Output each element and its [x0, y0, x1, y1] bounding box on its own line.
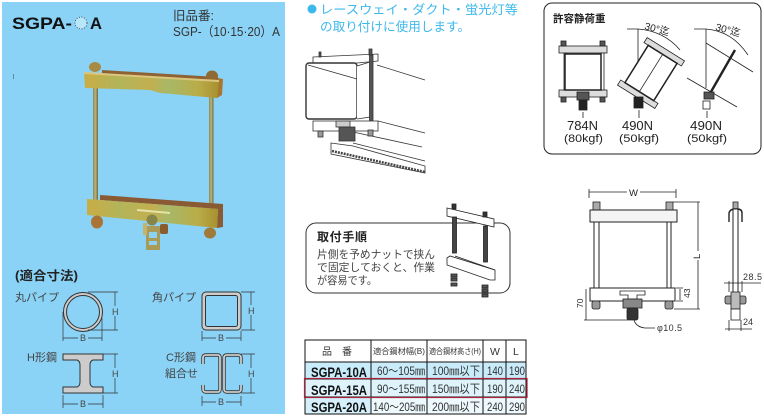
diagram: combined C-channel: C形鋼	[166, 350, 196, 364]
table row: SGPA-20A: 240	[487, 400, 503, 414]
table header: L	[513, 346, 519, 358]
dimension drawing: side view	[724, 202, 762, 331]
diagram: round pipe	[15, 291, 120, 343]
load diagram: side tilted 30 degrees: 490N	[690, 119, 722, 133]
load diagram: upright	[559, 41, 607, 145]
load diagram: tilted 30 degrees: 30°迄	[643, 19, 671, 38]
panel: allowable static load: 許容静荷重	[553, 12, 606, 25]
table row: SGPA-10A: 140	[487, 364, 503, 378]
load diagram: side tilted 30 degrees: (50kgf)	[687, 133, 727, 145]
diagram: square pipe: 角パイプ	[152, 291, 196, 304]
diagram: combined C-channel: 組合せ	[165, 367, 198, 380]
old part number	[173, 9, 280, 39]
diagram: H-beam	[27, 350, 120, 409]
diagram: square pipe	[152, 291, 256, 343]
diagram: H-beam: H	[112, 369, 118, 379]
title: SGPA-	[12, 14, 72, 33]
callout: installation procedure: が容易です。	[317, 273, 377, 287]
diagram: combined C-channel: H	[248, 369, 254, 379]
dimension drawing: front view: 43	[682, 288, 692, 298]
dimension drawing: front view: φ10.5	[657, 323, 682, 333]
callout: installation procedure: 取付手順	[317, 229, 367, 244]
table row: SGPA-10A: 190	[509, 364, 525, 378]
diagram: combined C-channel	[165, 350, 256, 407]
table row: SGPA-20A: 140～205㎜	[373, 400, 425, 414]
callout: installation procedure: 片側を予めナットで挟ん	[317, 247, 435, 261]
load diagram: tilted 30 degrees: 490N	[622, 119, 653, 133]
title	[12, 14, 102, 33]
heading: applicable sizes: (適合寸法)	[15, 268, 78, 283]
table row: SGPA-20A: 290	[509, 400, 525, 414]
dimension drawing: front view: 70	[575, 298, 585, 308]
illustration: installation steps	[447, 204, 495, 297]
table row: SGPA-15A: 240	[509, 382, 525, 396]
dimension drawing: side view: 28.5	[743, 272, 762, 282]
panel: allowable static load	[544, 3, 761, 154]
diagram: square pipe: B	[218, 333, 224, 343]
diagram: H-beam: H形鋼	[27, 350, 57, 364]
table row: SGPA-15A: 90～155㎜	[377, 382, 425, 396]
dimension drawing: front view: W	[629, 188, 638, 199]
diagram: round pipe: 丸パイプ	[15, 291, 59, 304]
load diagram: tilted 30 degrees	[618, 19, 684, 145]
load diagram: tilted 30 degrees: (50kgf)	[619, 133, 659, 145]
table header: W	[490, 346, 500, 358]
table row: SGPA-15A: 150㎜以下	[432, 382, 480, 396]
dimension drawing: front view: L	[692, 254, 703, 259]
callout: installation procedure: で固定しておくと、作業	[317, 261, 435, 274]
table row: SGPA-15A: 190	[487, 382, 503, 396]
product photo: bracket	[84, 62, 223, 250]
dimension drawing: side view: 24	[743, 317, 753, 327]
table header: 適合鋼材高さ(H)	[429, 346, 481, 356]
dimension drawing: front view	[575, 188, 703, 333]
table row: SGPA-10A: SGPA-10A	[311, 364, 367, 380]
table row: SGPA-20A: SGPA-20A	[311, 399, 367, 415]
diagram: square pipe: H	[248, 306, 254, 316]
table row: SGPA-10A: 60～105㎜	[377, 364, 425, 378]
load diagram: upright: (80kgf)	[564, 133, 603, 145]
usage note	[308, 2, 518, 34]
diagram: round pipe: B	[80, 333, 86, 343]
old part number: 旧品番:	[173, 9, 214, 23]
diagram: combined C-channel: B	[218, 397, 224, 407]
load diagram: side tilted 30 degrees	[687, 20, 753, 145]
table header	[322, 346, 519, 358]
table header: 適合鋼材幅(B)	[373, 346, 425, 356]
old part number: SGP-（10·15·20）A	[173, 24, 280, 39]
usage note: の取り付けに使用します。	[320, 19, 470, 34]
table row: SGPA-10A: 100㎜以下	[432, 364, 480, 378]
load diagram: upright: 784N	[567, 119, 598, 133]
load diagram: side tilted 30 degrees: 30°迄	[714, 20, 742, 39]
table row: SGPA-20A: 200㎜以下	[432, 400, 480, 414]
illustration: duct mounting	[306, 49, 425, 173]
title: A	[90, 14, 102, 33]
table row: SGPA-15A: SGPA-15A	[311, 382, 367, 398]
table row: SGPA-20A	[311, 399, 525, 415]
diagram: H-beam: B	[80, 399, 86, 409]
table: sizes	[304, 340, 527, 415]
table row: SGPA-10A	[311, 364, 525, 380]
table row: SGPA-15A	[311, 382, 525, 398]
diagram: round pipe: H	[112, 307, 118, 317]
callout: installation procedure	[306, 223, 510, 293]
panel: product	[2, 2, 285, 414]
table header: 品 番	[322, 346, 352, 358]
usage note: レースウェイ・ダクト・蛍光灯等	[320, 2, 518, 17]
